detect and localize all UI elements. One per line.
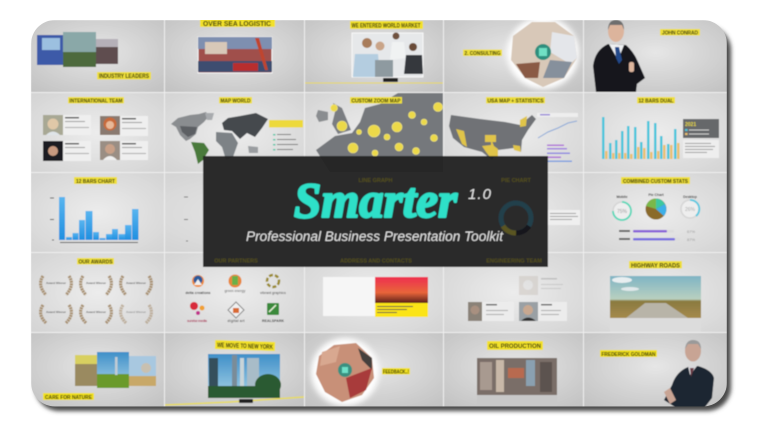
label: we move to new york: WE MOVE TO NEW YORK (217, 342, 273, 351)
partner names: sunrise media (187, 319, 207, 323)
award names: Award Winner (126, 310, 147, 314)
slide: oil production (444, 333, 583, 407)
award names (46, 281, 147, 314)
ring: desktop (681, 195, 699, 218)
portrait: Frederick Goldman (664, 340, 714, 407)
ghost headings: PIE CHART (501, 178, 531, 184)
photo reflection (610, 318, 701, 332)
horizontal stat bars (547, 144, 572, 162)
slide: combined custom stats (584, 173, 727, 252)
version number: 1.0 (468, 186, 492, 203)
slide: usa map + statistics (444, 93, 583, 172)
slide: pie chart (444, 173, 583, 252)
ghost headings: OUR PARTNERS (214, 258, 258, 264)
label: 12 bars dual: 12 BARS DUAL (638, 98, 674, 104)
slide: feedback (305, 333, 443, 407)
slide: over sea logistic (165, 19, 304, 92)
faded portrait (519, 276, 563, 295)
partner names (186, 289, 286, 323)
label: care for nature: CARE FOR NATURE (45, 395, 92, 401)
label: feedback: FEEDBACK..! (383, 370, 409, 376)
ring: desktop: 26% (685, 207, 696, 213)
octagon photo: hands (316, 343, 374, 402)
slide: we entered world market (305, 20, 443, 92)
ghost headings: ENGINEERING TEAM (486, 258, 542, 264)
slide: our partners (165, 253, 304, 332)
text card (548, 210, 580, 225)
ghost headings: LINE GRAPH (359, 178, 392, 184)
yellow swoosh line (165, 397, 304, 405)
award names: Award Winner (46, 281, 67, 285)
title: Smarter: Smarter (294, 172, 458, 228)
world map (171, 112, 268, 164)
ring: desktop: Desktop (683, 195, 697, 199)
map bubbles (330, 102, 442, 156)
team cards (43, 115, 148, 161)
label: map world: MAP WORLD (220, 98, 251, 104)
button (239, 399, 253, 403)
partner names: vibrant graphics (260, 291, 286, 295)
slide: john conrad (584, 20, 727, 92)
chart note box (683, 140, 719, 158)
white glow (311, 338, 379, 406)
portrait card one (468, 302, 514, 321)
slide: frederick goldman (584, 333, 727, 407)
chart legend box: 2021 (685, 122, 696, 128)
pie chart: Pie Chart (648, 193, 665, 197)
slide: custom zoom map (304, 92, 444, 157)
label: frederick goldman (600, 350, 657, 358)
slide: we move to new york (165, 333, 304, 407)
photo: highway (610, 276, 701, 318)
award names: Award Winner (126, 281, 147, 285)
slide: 12 bars chart (31, 173, 164, 252)
usa map (449, 115, 536, 160)
slide: international team (31, 93, 164, 172)
dual bar chart (602, 117, 680, 159)
progress bars: 67% (687, 229, 695, 234)
laurel wreaths (41, 276, 151, 323)
label: over sea logistic: OVER SEA LOGISTIC (203, 21, 271, 28)
progress bars (619, 229, 695, 242)
label: usa map + statistics: USA MAP + STATISTICS (488, 98, 544, 104)
ghost headings: ADDRESS AND CONTACTS (340, 258, 412, 264)
contact box (375, 303, 428, 317)
label: industry leaders: INDUSTRY LEADERS (99, 74, 149, 80)
label: john conrad: JOHN CONRAD (662, 30, 698, 36)
slide: engineering team (444, 253, 583, 332)
label: we entered world market: WE ENTERED WORLD MARKET (352, 24, 421, 30)
partner logos (190, 274, 279, 318)
label: international team: INTERNATIONAL TEAM (70, 98, 123, 104)
ghost donut chart (501, 203, 531, 233)
photo reflection (477, 395, 557, 407)
partner names: green energy (224, 289, 246, 293)
octagon photo: desk (511, 22, 577, 87)
button (383, 78, 398, 82)
label: highway roads: HIGHWAY ROADS (631, 264, 680, 270)
progress bars: 87% (687, 237, 695, 242)
partner names: delta creations (186, 291, 211, 295)
partner names: digital art (228, 319, 245, 323)
white glow (507, 17, 579, 89)
photo: refinery (477, 358, 557, 395)
subtitle: Professional Business Presentation Toolkit (246, 229, 504, 244)
slide: highway roads (584, 253, 727, 332)
legend callout (269, 120, 303, 150)
slide: care for nature (31, 333, 164, 407)
portrait card two (519, 302, 567, 321)
slide: 12 bars dual (584, 93, 727, 172)
line chart (537, 113, 578, 138)
photo: city sunset (375, 277, 428, 303)
photo group: nature (75, 352, 156, 388)
label: combined custom stats: COMBINED CUSTOM STATS (623, 179, 688, 185)
photo: port (198, 37, 272, 73)
label: consulting: 2. CONSULTING (464, 51, 500, 57)
award names: Award Winner (86, 281, 107, 285)
photo: business meeting (352, 32, 423, 77)
pie chart (646, 193, 666, 220)
slide: line graph (165, 173, 443, 252)
label: highway roads (629, 261, 682, 270)
centre title panel (203, 156, 548, 267)
slide: address and contacts (305, 253, 443, 332)
ring: mobile: 75% (617, 209, 628, 215)
photo group: industry (37, 32, 118, 67)
award names: Award Winner (86, 310, 107, 314)
ring: mobile: Mobile (616, 195, 628, 199)
street map (323, 277, 375, 316)
europe map (316, 92, 444, 157)
ghost headings (214, 178, 542, 264)
bar chart (50, 197, 138, 243)
award names: Award Winner (46, 310, 67, 314)
chart legend box (683, 119, 719, 138)
label: our awards: OUR AWARDS (78, 260, 113, 266)
photo: new york (208, 354, 281, 398)
label: 12 bars chart: 12 BARS CHART (76, 179, 116, 185)
line graph axis ticks (184, 196, 188, 242)
yellow swoosh line (305, 82, 443, 84)
label: oil production: OIL PRODUCTION (489, 344, 541, 350)
portrait: John Conrad (593, 20, 645, 92)
slide: industry leaders (31, 20, 164, 92)
slide: consulting (444, 17, 583, 92)
label: custom zoom map: CUSTOM ZOOM MAP (352, 98, 401, 104)
slide: our awards (31, 253, 164, 332)
label: combined custom stats (621, 177, 690, 185)
ring: mobile (613, 195, 631, 220)
slide: map world (165, 93, 304, 172)
partner names: REALSPARK (262, 319, 284, 323)
label: frederick goldman: FREDERICK GOLDMAN (602, 352, 656, 358)
